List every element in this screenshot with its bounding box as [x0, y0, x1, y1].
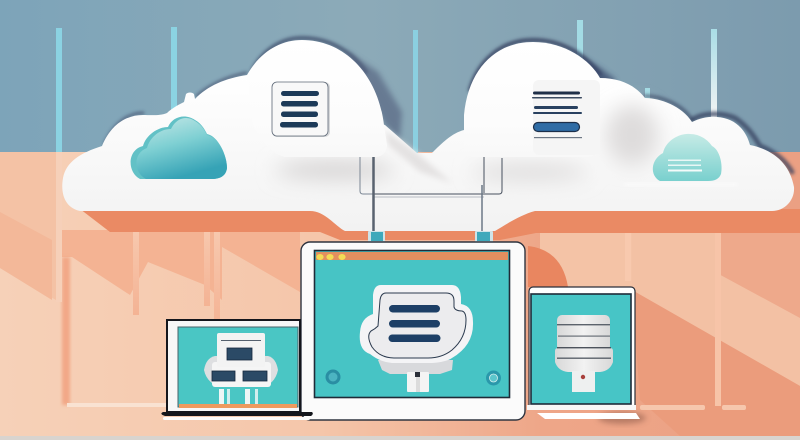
background: peach ground — [0, 152, 800, 440]
icon: network device — [204, 333, 278, 404]
status button left — [326, 370, 340, 384]
bottom orange strip — [179, 404, 297, 408]
connector: left teal clip — [368, 231, 385, 242]
background: sky band — [0, 0, 800, 153]
big monitor — [301, 242, 525, 420]
icon: plug device — [360, 285, 473, 392]
status button right — [486, 370, 501, 386]
wires — [360, 157, 502, 232]
main white cloud — [62, 75, 794, 231]
cloud shadow band — [80, 209, 800, 240]
shelf highlight — [625, 183, 737, 186]
left dome wedge shadow — [345, 50, 402, 140]
small teal cloud left — [131, 116, 227, 179]
icon: cylinder device — [555, 315, 613, 392]
background vertical light bars — [56, 20, 721, 406]
connector: right teal clip — [475, 231, 493, 242]
laptop base — [161, 412, 313, 416]
screen — [314, 250, 510, 398]
icon: server list card — [272, 82, 330, 137]
cloud shading under domes — [275, 105, 658, 180]
left dome — [247, 40, 387, 157]
laptop foot — [537, 413, 640, 419]
screen — [178, 327, 298, 407]
left laptop — [161, 320, 313, 420]
dome and cloud edge shadows — [105, 38, 792, 172]
icon: list panel — [532, 80, 600, 155]
laptop base — [527, 405, 636, 410]
right laptop — [527, 287, 646, 424]
laptop lip — [163, 417, 310, 420]
window title bar — [316, 252, 508, 260]
window dots — [316, 254, 346, 260]
right dome wedge shadow — [570, 50, 616, 100]
cloud fold between domes — [385, 130, 452, 183]
screen — [531, 294, 631, 404]
right dome — [464, 42, 600, 157]
small teal cloud right — [653, 134, 722, 181]
